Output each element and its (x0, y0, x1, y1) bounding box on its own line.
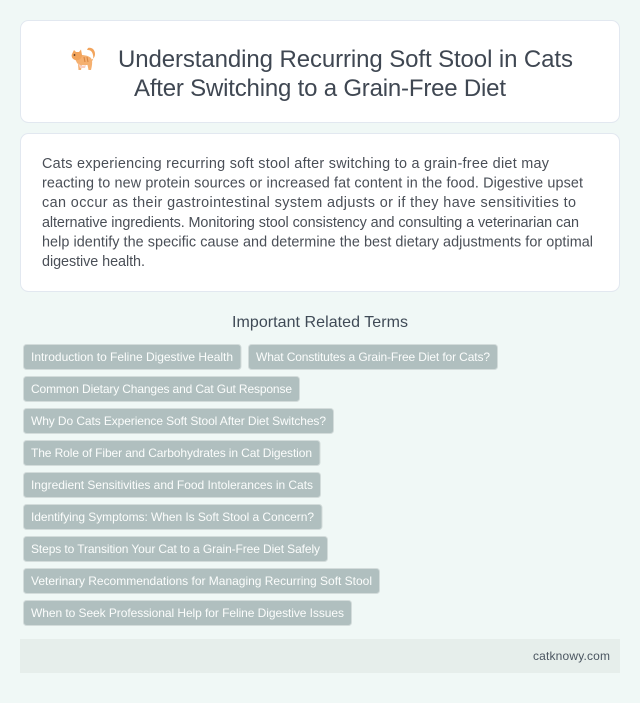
pill: veterinary recommendations (24, 568, 380, 594)
pill: grain-free definition (248, 344, 498, 370)
footer bar (20, 639, 620, 673)
heading: title: Understanding Recurring Soft Stool in Cats (118, 46, 573, 73)
footer: site name: catknowy.com (533, 649, 610, 663)
pill: sensitivities (24, 472, 320, 498)
text block: summary paragraph: can occur as their gastrointestinal system adjusts or if they have sensitivities to (42, 195, 576, 211)
heading: title: After Switching to a Grain-Free Diet (134, 75, 506, 102)
list: related term pills (24, 344, 498, 626)
heading: title (118, 46, 573, 102)
pill: fiber and carbohydrates: The Role of Fiber and Carbohydrates in Cat Digestion (31, 446, 312, 460)
text block: summary paragraph: help identify the specific cause and determine the best dietary adjustments for optimal (42, 234, 593, 250)
text block: summary paragraph (42, 156, 593, 270)
pill: symptoms: Identifying Symptoms: When Is Soft Stool a Concern? (31, 510, 314, 524)
pill: transition steps (24, 536, 328, 562)
pill: symptoms (24, 504, 322, 530)
text block: summary paragraph: alternative ingredients. Monitoring stool consistency and consulting a veterinarian can (42, 215, 579, 231)
pill: sensitivities: Ingredient Sensitivities and Food Intolerances in Cats (31, 478, 313, 492)
text block: summary paragraph: Cats experiencing recurring soft stool after switching to a grain-free diet may (42, 156, 550, 172)
pill: fiber and carbohydrates (24, 440, 320, 466)
icon: cat (72, 48, 95, 70)
pill: grain-free definition: What Constitutes a Grain-Free Diet for Cats? (256, 350, 490, 364)
pill: dietary changes: Common Dietary Changes and Cat Gut Response (31, 382, 292, 396)
panel: summary card (20, 134, 620, 292)
pill: professional help: When to Seek Professional Help for Feline Digestive Issues (31, 606, 344, 620)
pill: why soft stool (24, 408, 334, 434)
pill: veterinary recommendations: Veterinary Recommendations for Managing Recurring Soft Stool (31, 574, 372, 588)
pill: introduction (24, 344, 241, 370)
heading: important related terms: Important Related Terms (232, 314, 408, 331)
pill: professional help (24, 600, 352, 626)
pill: transition steps: Steps to Transition Your Cat to a Grain-Free Diet Safely (31, 542, 320, 556)
pill: introduction: Introduction to Feline Digestive Health (31, 350, 233, 364)
pill: why soft stool: Why Do Cats Experience Soft Stool After Diet Switches? (31, 414, 326, 428)
text block: summary paragraph: reacting to new protein sources or increased fat content in the food. Digestive upset (42, 176, 583, 192)
panel: title card (20, 20, 620, 122)
text block: summary paragraph: digestive health. (42, 254, 145, 270)
pill: dietary changes (24, 376, 300, 402)
